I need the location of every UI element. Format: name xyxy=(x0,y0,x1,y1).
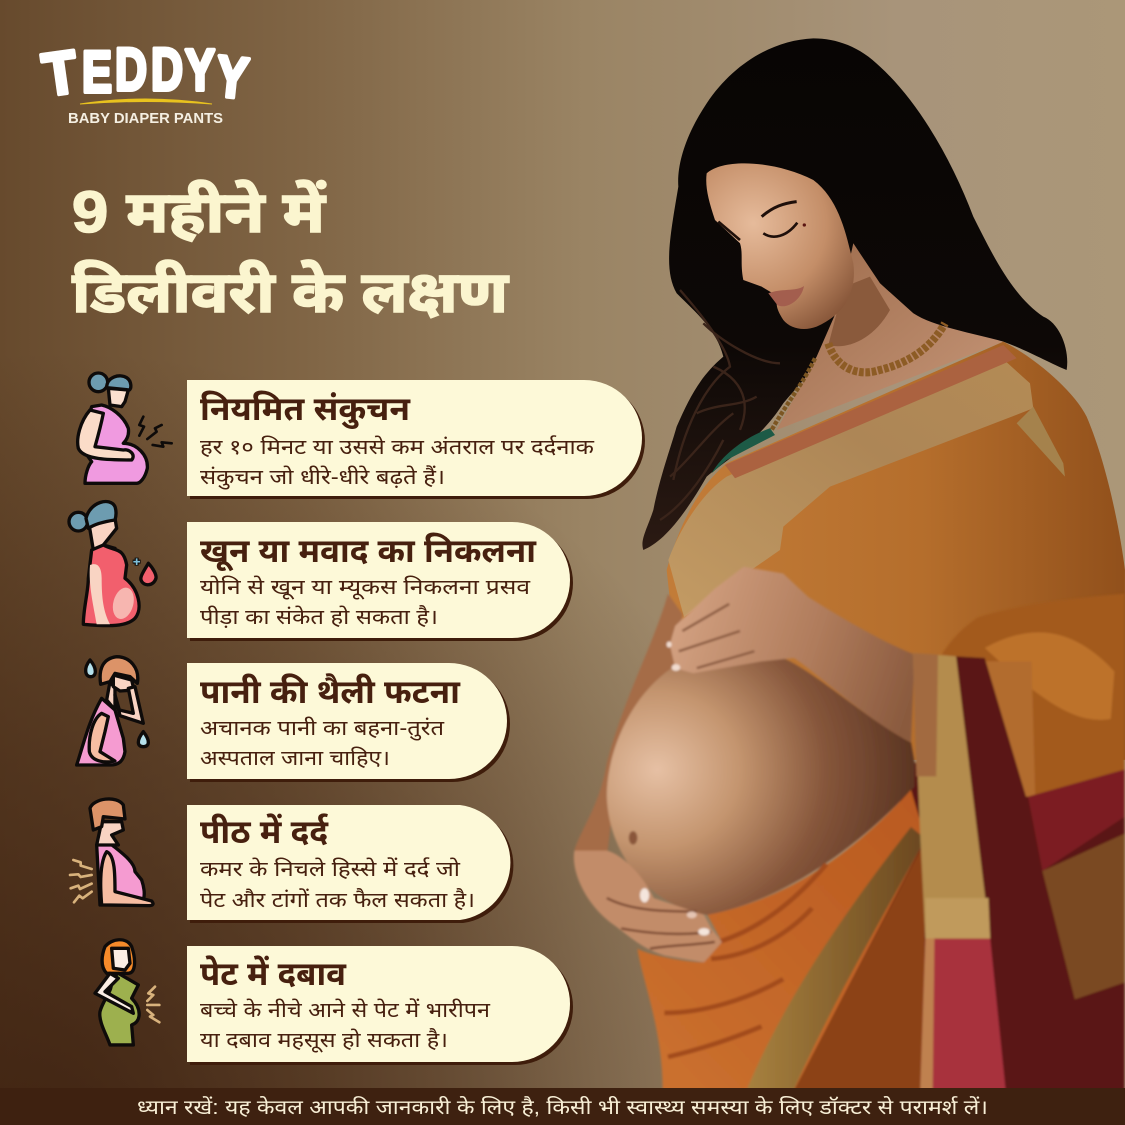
panel: bleeding or mucus discharge: खून या मवाद का निकलना xyxy=(200,532,537,572)
saree pallu border xyxy=(913,653,990,939)
panel: bleeding or mucus discharge: पीड़ा का संकेत हो सकता है। xyxy=(200,604,438,629)
logo: Teddyy Baby Diaper Pants: D xyxy=(115,36,147,103)
panel: back pain xyxy=(187,805,513,923)
panel: water breaking: अस्पताल जाना चाहिए। xyxy=(200,746,390,770)
panel: back pain: पेट और टांगों तक फैल सकता है। xyxy=(200,887,475,912)
hair xyxy=(642,38,1067,550)
panel: water breaking: अचानक पानी का बहना-तुरंत xyxy=(200,716,445,741)
title: 9 महीने में xyxy=(72,180,326,245)
panel: water breaking xyxy=(187,663,510,782)
saree shoulder and torso xyxy=(667,342,1125,760)
right drape xyxy=(942,594,1124,797)
necklace xyxy=(772,323,945,430)
logo: Teddyy Baby Diaper Pants xyxy=(39,36,251,127)
logo: Teddyy Baby Diaper Pants: Y xyxy=(185,38,215,103)
forearm and upper hand xyxy=(670,567,915,743)
footer disclaimer xyxy=(0,1088,1125,1125)
panel: abdominal pressure: बच्चे के नीचे आने से पेट में भारीपन xyxy=(200,998,490,1022)
rear arm xyxy=(574,594,682,857)
panel: abdominal pressure: या दबाव महसूस हो सकता है। xyxy=(200,1027,448,1053)
panel: back pain: कमर के निचले हिस्से में दर्द जो xyxy=(200,857,461,881)
logo: Teddyy Baby Diaper Pants: E xyxy=(82,40,112,105)
panel: regular contractions xyxy=(187,380,645,499)
saree lower section and belly xyxy=(574,567,1124,1097)
panel: regular contractions: नियमित संकुचन xyxy=(200,390,411,430)
title: डिलीवरी के लक्षण xyxy=(72,260,509,325)
front saree drape xyxy=(637,790,925,1097)
belly xyxy=(607,657,915,915)
logo: Teddyy Baby Diaper Pants: D xyxy=(151,36,183,103)
icon: woman with abdominal pressure xyxy=(95,940,159,1045)
panel: bleeding or mucus discharge: योनि से खून या म्यूकस निकलना प्रसव xyxy=(200,575,530,600)
face xyxy=(706,163,854,329)
panel: abdominal pressure xyxy=(187,946,573,1065)
icon: woman with water drops xyxy=(77,657,148,765)
panel: abdominal pressure: पेट में दबाव xyxy=(200,954,347,992)
lower hand xyxy=(574,851,722,962)
gold woven border xyxy=(668,353,1033,617)
icon: woman with back pain xyxy=(70,799,153,906)
neck and chest xyxy=(777,243,1003,430)
green blouse xyxy=(712,428,775,473)
logo: Teddyy Baby Diaper Pants: Y xyxy=(213,44,251,112)
panel: water breaking: पानी की थैली फटना xyxy=(200,672,461,710)
panel: regular contractions: हर १० मिनट या उससे कम अंतराल पर दर्दनाक xyxy=(200,435,595,459)
logo: Teddyy Baby Diaper Pants: BABY DIAPER PANTS xyxy=(68,111,223,127)
title xyxy=(72,180,509,325)
icon: woman with contractions xyxy=(78,373,172,483)
icon: woman with blood drop xyxy=(69,502,156,626)
saree upper section, hair and face xyxy=(642,38,1125,760)
logo: Teddyy Baby Diaper Pants: T xyxy=(39,38,82,109)
photo: pregnant woman in orange saree xyxy=(574,38,1125,1097)
panel: regular contractions: संकुचन जो धीरे-धीरे बढ़ते हैं। xyxy=(200,465,445,490)
base shadow behind drapes xyxy=(790,763,1124,1097)
panel: back pain: पीठ में दर्द xyxy=(200,813,329,850)
footer disclaimer: ध्यान रखें: यह केवल आपकी जानकारी के लिए है, किसी भी स्वास्थ्य समस्या के लिए डॉक्टर से परामर्श लें। xyxy=(137,1094,988,1119)
panel: bleeding or mucus discharge xyxy=(187,522,573,641)
